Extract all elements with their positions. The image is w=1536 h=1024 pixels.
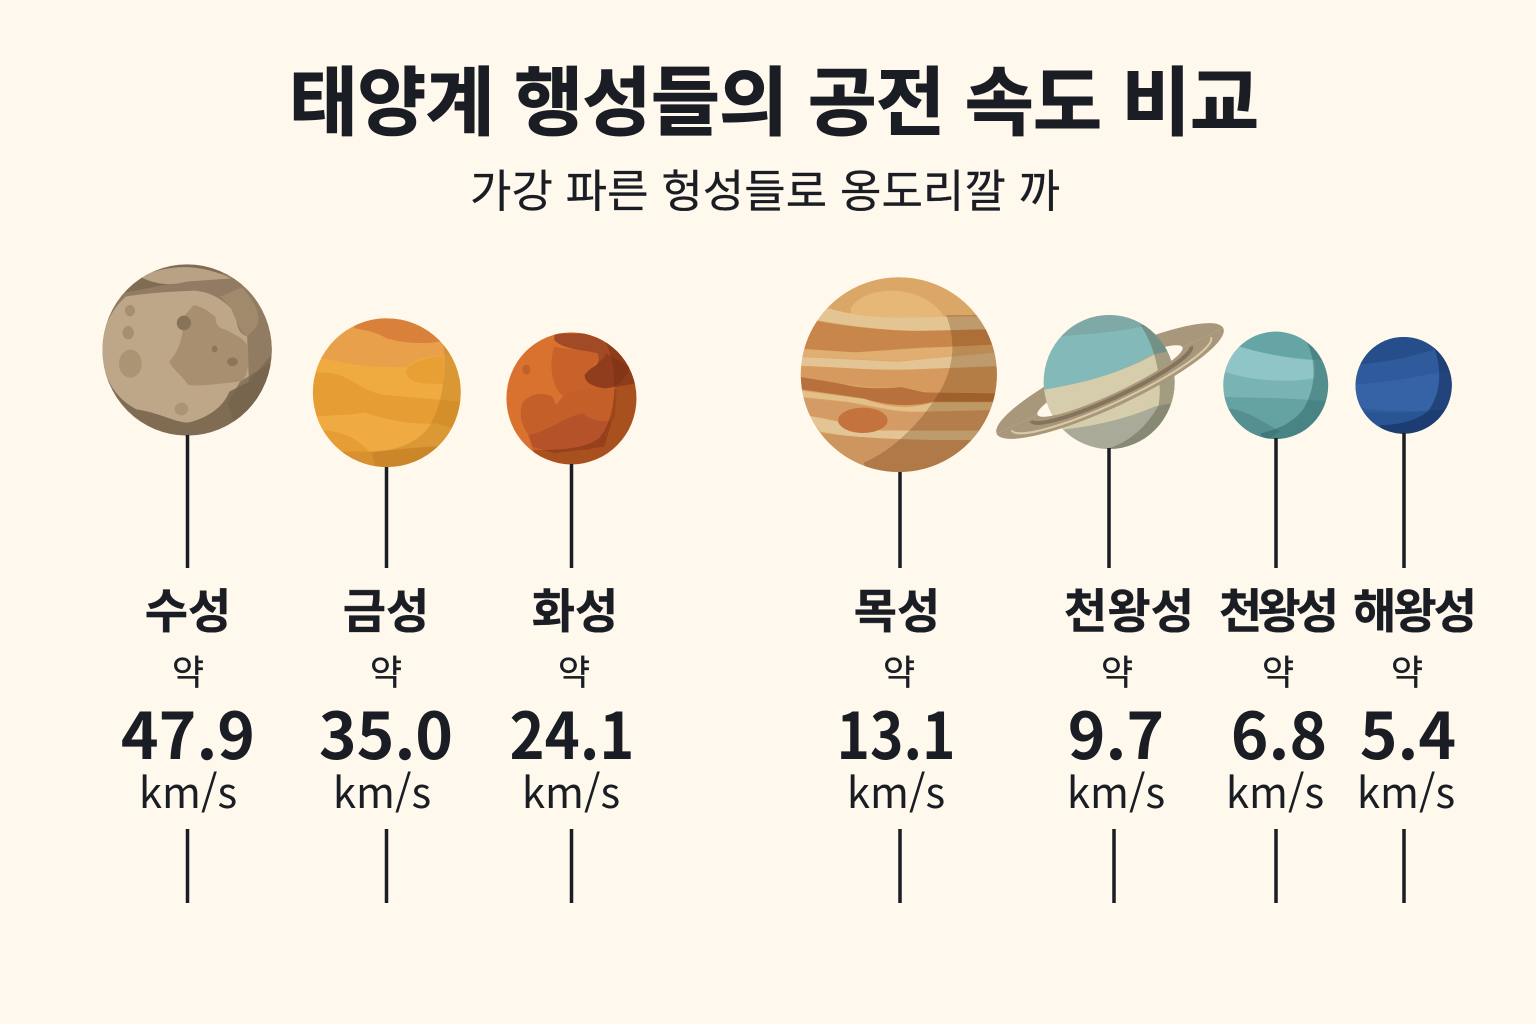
- icon: ringed planet: [996, 315, 1224, 449]
- unit: km/s: [522, 760, 620, 821]
- connector line: [385, 467, 388, 568]
- prefix: 약: [1101, 645, 1133, 696]
- name: 천왕성: [1219, 573, 1339, 642]
- prefix: 약: [1262, 645, 1294, 696]
- icon: Venus planet: [311, 317, 463, 470]
- name: 수성: [145, 573, 231, 642]
- title: 태양계 행성들의 공전 속도 비교: [289, 42, 1259, 151]
- unit: km/s: [1357, 760, 1455, 821]
- connector line: [186, 435, 189, 568]
- lower line: [1112, 829, 1116, 903]
- speed value: 47.9: [121, 686, 255, 778]
- speed value: 9.7: [1068, 686, 1164, 778]
- name: 화성: [532, 573, 618, 642]
- speed value: 5.4: [1360, 686, 1456, 778]
- prefix: 약: [370, 645, 402, 696]
- speed value: 24.1: [510, 686, 634, 778]
- infographic canvas: [102, 65, 1472, 903]
- lower line: [898, 829, 902, 903]
- speed value: 6.8: [1231, 686, 1327, 778]
- icon: Jupiter planet: [799, 275, 1002, 478]
- ring: front half: [997, 328, 1234, 457]
- column: Uranus: [1219, 330, 1339, 903]
- column: Mercury: [101, 263, 276, 903]
- prefix: 약: [1391, 645, 1423, 696]
- column: Neptune: [1353, 336, 1477, 903]
- icon: Neptune planet: [1354, 336, 1454, 435]
- column: Mars: [504, 330, 638, 903]
- speed value: 35.0: [319, 686, 453, 778]
- ring: back half: [986, 305, 1223, 434]
- connector line: [1402, 433, 1406, 568]
- name: 목성: [854, 573, 940, 642]
- connector line: [1107, 448, 1111, 568]
- unit: km/s: [847, 760, 945, 821]
- unit: km/s: [333, 760, 431, 821]
- column: Saturn (labelled 천왕성): [986, 305, 1234, 903]
- lower line: [570, 829, 573, 903]
- lower line: [186, 829, 189, 903]
- unit: km/s: [139, 760, 237, 821]
- subtitle: 가강 파른 헝성들로 옹도리깔 까: [470, 155, 1060, 220]
- connector line: [1274, 438, 1278, 568]
- column: Venus: [311, 317, 463, 903]
- name: 금성: [343, 573, 429, 642]
- prefix: 약: [172, 645, 204, 696]
- connector line: [570, 464, 573, 568]
- lower line: [1274, 829, 1278, 903]
- prefix: 약: [883, 645, 915, 696]
- unit: km/s: [1067, 760, 1165, 821]
- unit: km/s: [1226, 760, 1324, 821]
- name: 해왕성: [1353, 573, 1477, 642]
- column: Jupiter: [799, 275, 1002, 903]
- icon: Uranus planet: [1222, 330, 1330, 440]
- speed value: 13.1: [836, 686, 956, 778]
- name: 천왕성: [1064, 573, 1194, 642]
- prefix: 약: [558, 645, 590, 696]
- icon: Mercury planet: [101, 263, 276, 437]
- lower line: [1402, 829, 1406, 903]
- icon: Mars planet: [504, 330, 638, 467]
- connector line: [898, 472, 902, 568]
- lower line: [385, 829, 388, 903]
